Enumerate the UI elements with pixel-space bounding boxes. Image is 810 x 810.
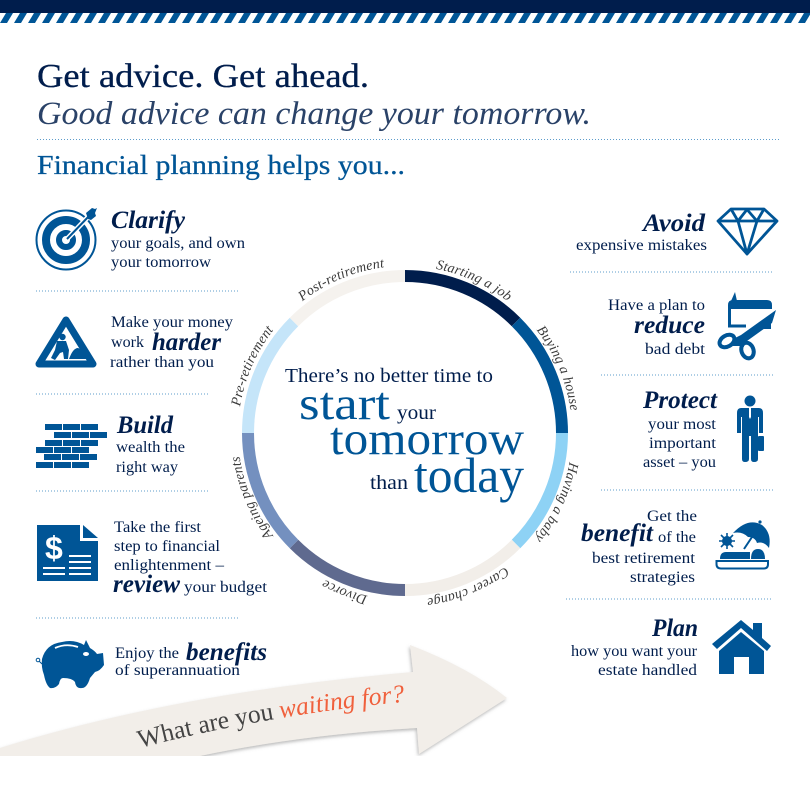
text: benefit [581,508,697,586]
panel: reduce [608,292,776,360]
text: review [113,519,268,598]
panel: benefit [581,508,770,586]
text: protect: asset – you [643,454,716,471]
text: harder: work [111,334,144,351]
arrow caption: What are you waiting for? [136,685,404,747]
text: reduce: reduce [634,312,705,339]
text: benefit: benefit [581,520,654,547]
panel: superannuation [36,639,267,688]
panel: plan [571,615,771,679]
icon: businessman [737,396,764,462]
text: superannuation [115,639,267,679]
text: review: Take the first [114,519,202,536]
icon: budget document [37,525,98,581]
panel: protect [642,387,764,471]
text: benefit: of the [658,529,696,546]
icon: target [36,208,97,270]
arrow: what are you waiting for [0,645,507,756]
icon: construction sign [39,320,93,364]
centre message: your [397,402,436,424]
icon: budget document: $ [45,530,63,566]
ring labels [231,260,578,605]
chart: life stages ring [231,260,578,605]
text: review: your budget [184,579,268,596]
text: protect: your most [648,416,717,433]
icon: bricks [36,424,107,468]
centre message: today [414,447,524,503]
text: clarify [111,235,245,271]
heading: clarify: Clarify [111,207,186,234]
ring labels: Ageing parents [232,457,274,538]
heading: protect: Protect [642,387,718,414]
text: reduce: bad debt [645,341,706,358]
title [37,58,591,132]
text: harder: rather than you [110,354,214,371]
title: Get advice. Get ahead. [37,58,369,95]
icon: scissors cutting card [717,292,776,360]
text: build: wealth the [116,439,185,456]
text: review: step to financial [114,538,220,555]
centre message: tomorrow [330,413,524,465]
panel: review [37,519,268,598]
text: harder: harder [152,329,221,356]
text: build [116,439,185,476]
text: harder [110,314,233,371]
text: review: review [113,571,180,598]
text: build: right way [116,459,178,476]
icon: piggy bank [36,640,104,688]
text: plan: estate handled [598,662,697,679]
text: harder: Make your money [111,314,233,331]
text: benefit: strategies [630,569,695,586]
text: reduce [608,297,706,358]
centre message: than [370,472,408,494]
ring labels: Having a baby [536,462,578,542]
subheading: Financial planning helps you... [37,150,405,180]
ring labels: Career change [428,568,508,605]
icon: diamond [718,209,777,254]
heading: plan: Plan [651,615,698,642]
icon: beach retirement [716,520,770,568]
text: superannuation: of superannuation [115,662,240,679]
icon: house [712,620,771,674]
ring labels: Post-retirement [298,260,384,302]
text: benefit: best retirement [592,550,696,567]
ring labels: Pre-retirement [231,326,273,407]
top banner [0,0,810,23]
panel: harder [39,314,233,371]
text: superannuation: benefits [186,639,267,666]
text: protect [643,416,717,471]
text: plan: how you want your [571,643,698,660]
panel: clarify [36,207,245,271]
centre message: There’s no better time to [285,365,493,387]
title: Good advice can change your tomorrow. [37,96,591,132]
text: clarify: your tomorrow [111,254,212,271]
text: protect: important [649,435,717,452]
text: clarify: your goals, and own [111,235,245,252]
text: plan [571,643,698,679]
panel: build [36,412,185,476]
centre message: start [299,378,390,430]
text: reduce: Have a plan to [608,297,705,314]
text: benefit: Get the [647,508,697,525]
ring labels: Divorce [322,580,368,604]
heading: build: Build [116,412,173,439]
ring labels: Buying a house [536,326,577,410]
text: review: enlightenment – [114,557,224,574]
text: superannuation: Enjoy the [115,645,179,662]
heading: avoid: Avoid [641,210,706,237]
ring labels: Starting a job [436,260,510,300]
panel: avoid [576,209,777,254]
text: avoid: expensive mistakes [576,237,707,254]
centre message [285,365,524,503]
